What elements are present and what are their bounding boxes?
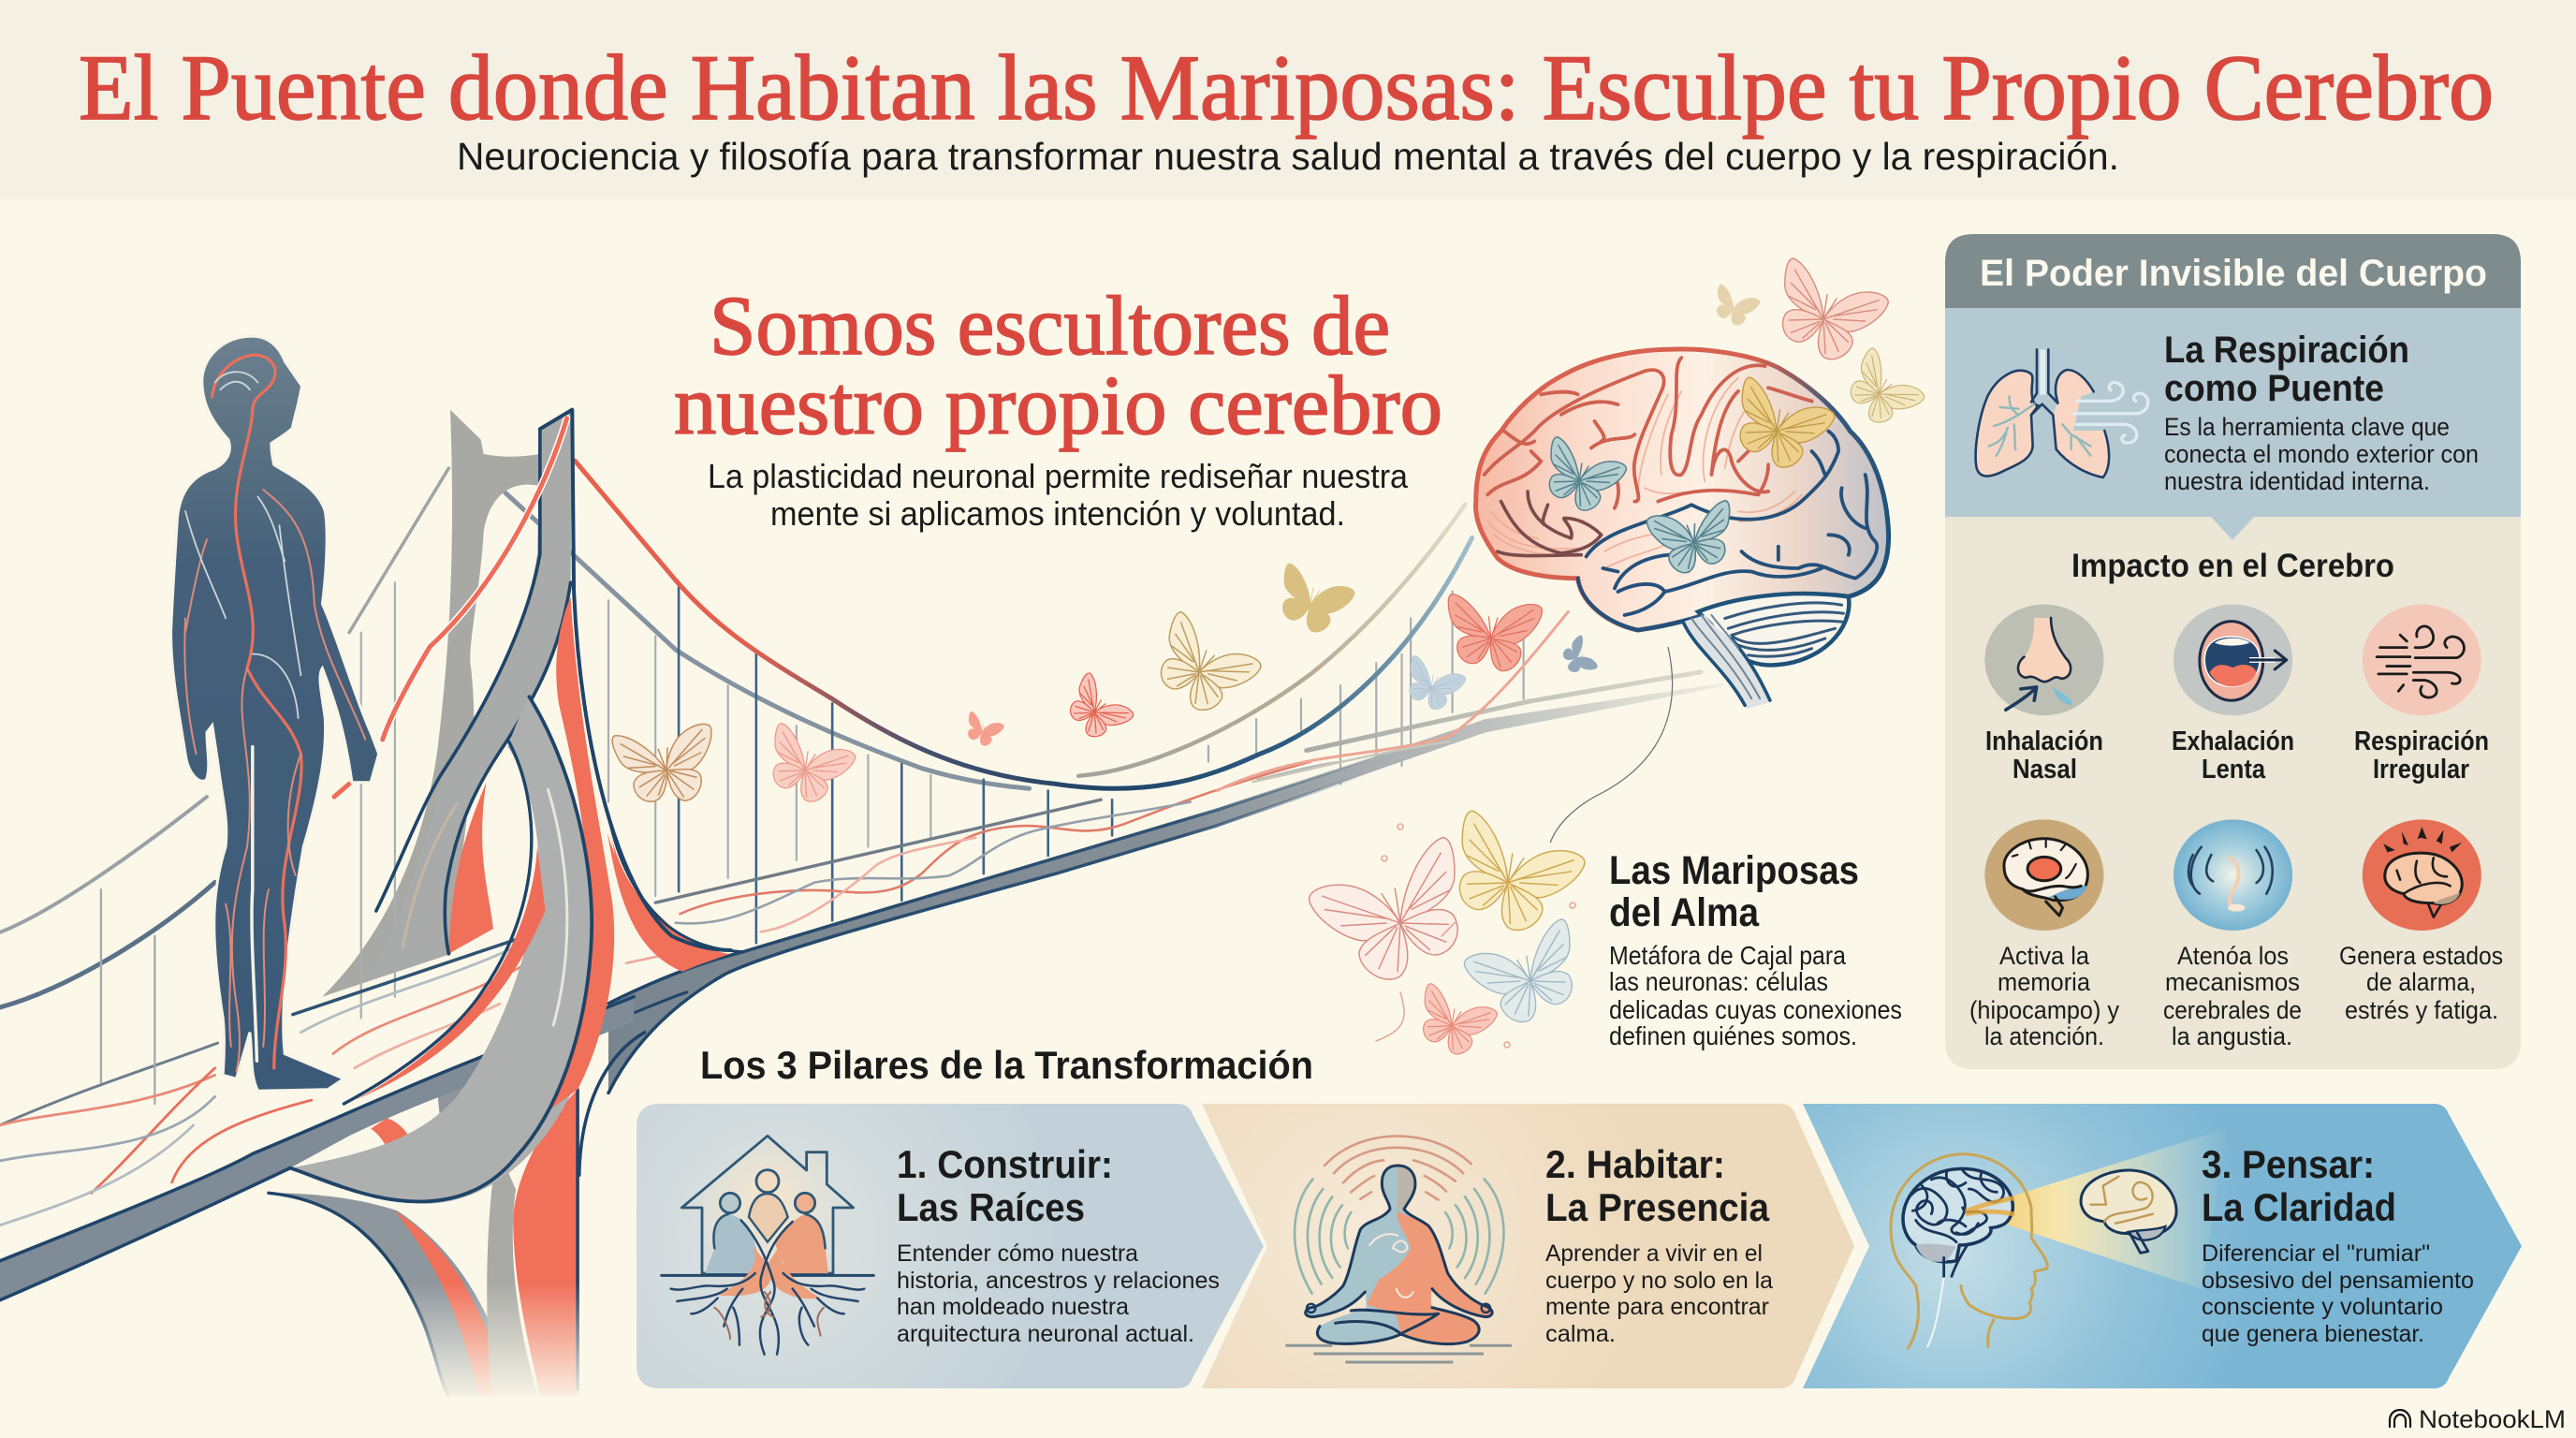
icon: alarm brain <box>2363 819 2481 931</box>
icon: irregular breath <box>2363 605 2481 715</box>
deck threads left <box>0 946 532 1225</box>
coral strand <box>355 846 546 1100</box>
pillar 3 text: obsesivo del pensamiento <box>2202 1268 2474 1294</box>
arch under the deck <box>269 1193 516 1397</box>
icon labels: Nasal <box>2012 755 2077 785</box>
pillar 1 <box>637 1104 1264 1388</box>
effect descriptions <box>1969 942 2503 1050</box>
subtitle: Neurociencia y filosofía para transformar nuestra salud mental a través del cuerpo y la respiración. <box>457 135 2119 178</box>
coral column <box>548 596 614 1111</box>
grey cable <box>505 493 1030 788</box>
description <box>2164 413 2479 495</box>
nerve lines <box>184 355 365 1072</box>
stray coral thread <box>1217 611 1568 791</box>
heading: sculptors: Somos escultores de <box>710 280 1390 373</box>
icon: lungs <box>1976 349 2148 477</box>
pillar 2 text: 2. Habitar: <box>1545 1142 1725 1186</box>
coral under-deck ribbons <box>395 1211 510 1397</box>
pillar 3 <box>1803 1104 2522 1388</box>
pillar 1 text: 1. Construir: <box>897 1142 1113 1186</box>
text: butterflies of the soul: definen quiénes somos. <box>1609 1021 1857 1050</box>
heading: pillars: Los 3 Pilares de la Transformación <box>700 1043 1313 1087</box>
pillar 3 text: La Claridad <box>2202 1185 2396 1229</box>
hangers <box>608 592 1524 896</box>
icon: head with brains and beam <box>1891 1128 2228 1348</box>
intro text <box>708 457 1409 533</box>
neural threads on deck <box>626 762 1342 963</box>
icon labels: Exhalación <box>2172 726 2294 756</box>
icon labels: Respiración <box>2354 726 2489 756</box>
effect descriptions: estrés y fatiga. <box>2345 996 2498 1024</box>
effect descriptions: mecanismos <box>2165 968 2300 996</box>
icon labels: Lenta <box>2202 755 2266 785</box>
pillar 3 text <box>2202 1142 2474 1347</box>
brain <box>1475 349 1889 709</box>
icon: nose <box>1984 605 2103 715</box>
pillar 1 text: Las Raíces <box>897 1185 1085 1229</box>
folds: dark <box>1498 492 1602 556</box>
effect descriptions: de alarma, <box>2366 968 2476 996</box>
upper rail <box>655 800 1101 902</box>
brain stem <box>1683 615 1772 709</box>
header band <box>0 0 2576 199</box>
text: butterflies of the soul: del Alma <box>1609 890 1760 935</box>
pillar 2 text: La Presencia <box>1545 1185 1770 1229</box>
icon labels: Irregular <box>2373 755 2469 785</box>
text: butterflies of the soul: las neuronas: células <box>1609 967 1828 996</box>
description: Es la herramienta clave que <box>2164 413 2450 441</box>
deck band <box>608 683 1722 1093</box>
icon: mouth <box>2174 605 2292 715</box>
icon labels: Inhalación <box>1985 726 2103 756</box>
grey S ribbon <box>365 410 572 982</box>
cerebellum <box>1698 594 1849 666</box>
effect descriptions: (hipocampo) y <box>1969 996 2119 1024</box>
pillar 1 text: han moldeado nuestra <box>897 1294 1129 1320</box>
icon: meditating figure <box>1285 1137 1512 1362</box>
effect descriptions: cerebrales de <box>2163 996 2302 1024</box>
pillar 2 text: Aprender a vivir en el <box>1545 1240 1763 1267</box>
near deck rail <box>0 997 634 1300</box>
pillar 1 text: Entender cómo nuestra <box>897 1240 1138 1267</box>
pillar 2 text: calma. <box>1545 1321 1616 1347</box>
pillar 2 text: mente para encontrar <box>1545 1294 1769 1320</box>
breath as a bridge: La Respiración <box>2164 330 2409 371</box>
icon: house with roots <box>662 1136 873 1355</box>
pillar 2 text: cuerpo y no solo en la <box>1545 1268 1773 1294</box>
bridge illustration: near tower and deck <box>0 336 731 1397</box>
pillar 3 text: consciente y voluntario <box>2202 1294 2443 1320</box>
thick grey ribbon <box>290 697 596 1204</box>
pillar 1 text: historia, ancestros y relaciones <box>897 1268 1220 1294</box>
pillar 2 text <box>1545 1142 1773 1347</box>
icons grid <box>1984 605 2481 931</box>
main cable red to navy <box>575 461 1472 788</box>
pillar 2 <box>1202 1104 1854 1388</box>
subheading: impact: Impacto en el Cerebro <box>2071 548 2394 584</box>
panel: invisible power of the body: como Puente <box>2164 368 2384 409</box>
effect descriptions: Atenóa los <box>2177 942 2289 970</box>
left rails <box>0 468 448 1125</box>
thin hangers near tower <box>361 582 395 1018</box>
icon: memory brain <box>1984 819 2103 931</box>
heading: sculptors: nuestro propio cerebro <box>674 360 1442 452</box>
effect descriptions: Activa la <box>1999 942 2090 970</box>
coral fan at tower base <box>608 824 729 970</box>
description: nuestra identidad interna. <box>2164 467 2430 495</box>
effect descriptions: la atención. <box>1984 1022 2104 1050</box>
tan cable <box>1078 504 1465 776</box>
butterflies along the bridge <box>606 564 1606 821</box>
folds: navy <box>1578 432 1877 630</box>
pillar 1 text <box>897 1142 1220 1347</box>
text: butterflies of the soul: delicadas cuyas conexiones <box>1609 995 1902 1024</box>
effect descriptions: la angustia. <box>2172 1022 2292 1050</box>
butterflies on the brain <box>1549 258 1934 580</box>
panel: invisible power of the body <box>1945 234 2521 1069</box>
text: butterflies of the soul: Metáfora de Cajal para <box>1609 941 1846 970</box>
bridge illustration: far span, deck and cables <box>505 461 1722 1093</box>
pillar 3 text: 3. Pensar: <box>2202 1142 2375 1186</box>
NotebookLM mark: NotebookLM <box>2419 1405 2566 1433</box>
heading: sculptors <box>674 280 1442 452</box>
person <box>171 336 379 1091</box>
description: conecta el mondo exterior con <box>2164 440 2479 468</box>
pillar 3 text: que genera bienestar. <box>2202 1321 2424 1347</box>
pillar 3 text: Diferenciar el "rumiar" <box>2202 1240 2430 1267</box>
cortex shading <box>1487 378 1802 568</box>
callout line <box>1550 648 1673 843</box>
intro text: La plasticidad neuronal permite rediseñar nuestra <box>708 457 1409 495</box>
folds: red <box>1485 358 1812 508</box>
icon labels <box>1985 726 2489 785</box>
pillar 1 text: arquitectura neuronal actual. <box>897 1321 1194 1347</box>
effect descriptions: memoria <box>1998 968 2091 996</box>
text: butterflies of the soul: Las Mariposas <box>1609 848 1859 893</box>
title: El Puente donde Habitan las Mariposas: Esculpe tu Propio Cerebro <box>79 36 2494 139</box>
bottom fade of the bridge <box>356 1283 637 1404</box>
far tower <box>322 410 540 997</box>
effect descriptions: Genera estados <box>2339 942 2503 970</box>
butterflies cluster <box>1310 811 1585 1054</box>
coral cable to hand <box>383 418 567 740</box>
intro text: mente si aplicamos intención y voluntad. <box>770 494 1345 533</box>
text: butterflies of the soul <box>1609 848 1902 1050</box>
icon: calming waves <box>2174 819 2292 931</box>
panel heading: El Poder Invisible del Cuerpo <box>1980 253 2487 294</box>
